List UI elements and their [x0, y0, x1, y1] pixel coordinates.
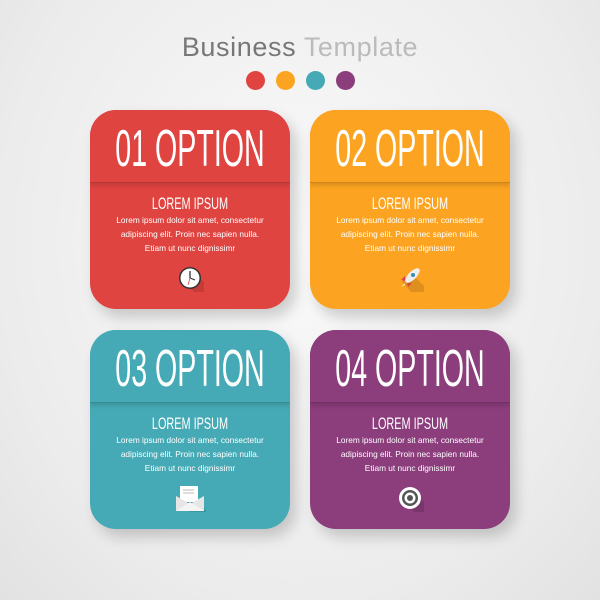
subheading: LOREM IPSUM: [152, 414, 228, 433]
text block: Etiam ut nunc dignissimr: [365, 243, 455, 253]
color dots: [246, 71, 355, 90]
panel: option 04: [310, 330, 510, 529]
heading 04: 04 OPTION: [335, 340, 485, 398]
icon: clock: [179, 267, 204, 292]
text block: [116, 435, 264, 473]
text block: Etiam ut nunc dignissimr: [145, 243, 235, 253]
text block: Lorem ipsum dolor sit amet, consectetur: [116, 435, 264, 445]
text block: Lorem ipsum dolor sit amet, consectetur: [116, 215, 264, 225]
panel: option 02: [310, 110, 510, 309]
heading 03: 03 OPTION: [115, 340, 265, 398]
text block: [336, 435, 484, 473]
text block: adipiscing elit. Proin nec sapien nulla.: [341, 229, 479, 239]
heading 01: 01 OPTION: [115, 120, 265, 178]
text block: [116, 215, 264, 253]
subheading: LOREM IPSUM: [372, 414, 448, 433]
panel: option 03: [90, 330, 290, 529]
subheading: LOREM IPSUM: [152, 194, 228, 213]
text block: Lorem ipsum dolor sit amet, consectetur: [336, 215, 484, 225]
text block: [336, 215, 484, 253]
title: Business Template: [182, 32, 418, 62]
text block: Etiam ut nunc dignissimr: [145, 463, 235, 473]
icon: target: [399, 487, 424, 512]
text block: Etiam ut nunc dignissimr: [365, 463, 455, 473]
text block: Lorem ipsum dolor sit amet, consectetur: [336, 435, 484, 445]
subheading: LOREM IPSUM: [372, 194, 448, 213]
text block: adipiscing elit. Proin nec sapien nulla.: [341, 449, 479, 459]
icon: envelope: [176, 486, 206, 512]
text block: adipiscing elit. Proin nec sapien nulla.: [121, 229, 259, 239]
panel: option 01: [90, 110, 290, 309]
icon: rocket: [401, 268, 424, 292]
heading 02: 02 OPTION: [335, 120, 485, 178]
text block: adipiscing elit. Proin nec sapien nulla.: [121, 449, 259, 459]
